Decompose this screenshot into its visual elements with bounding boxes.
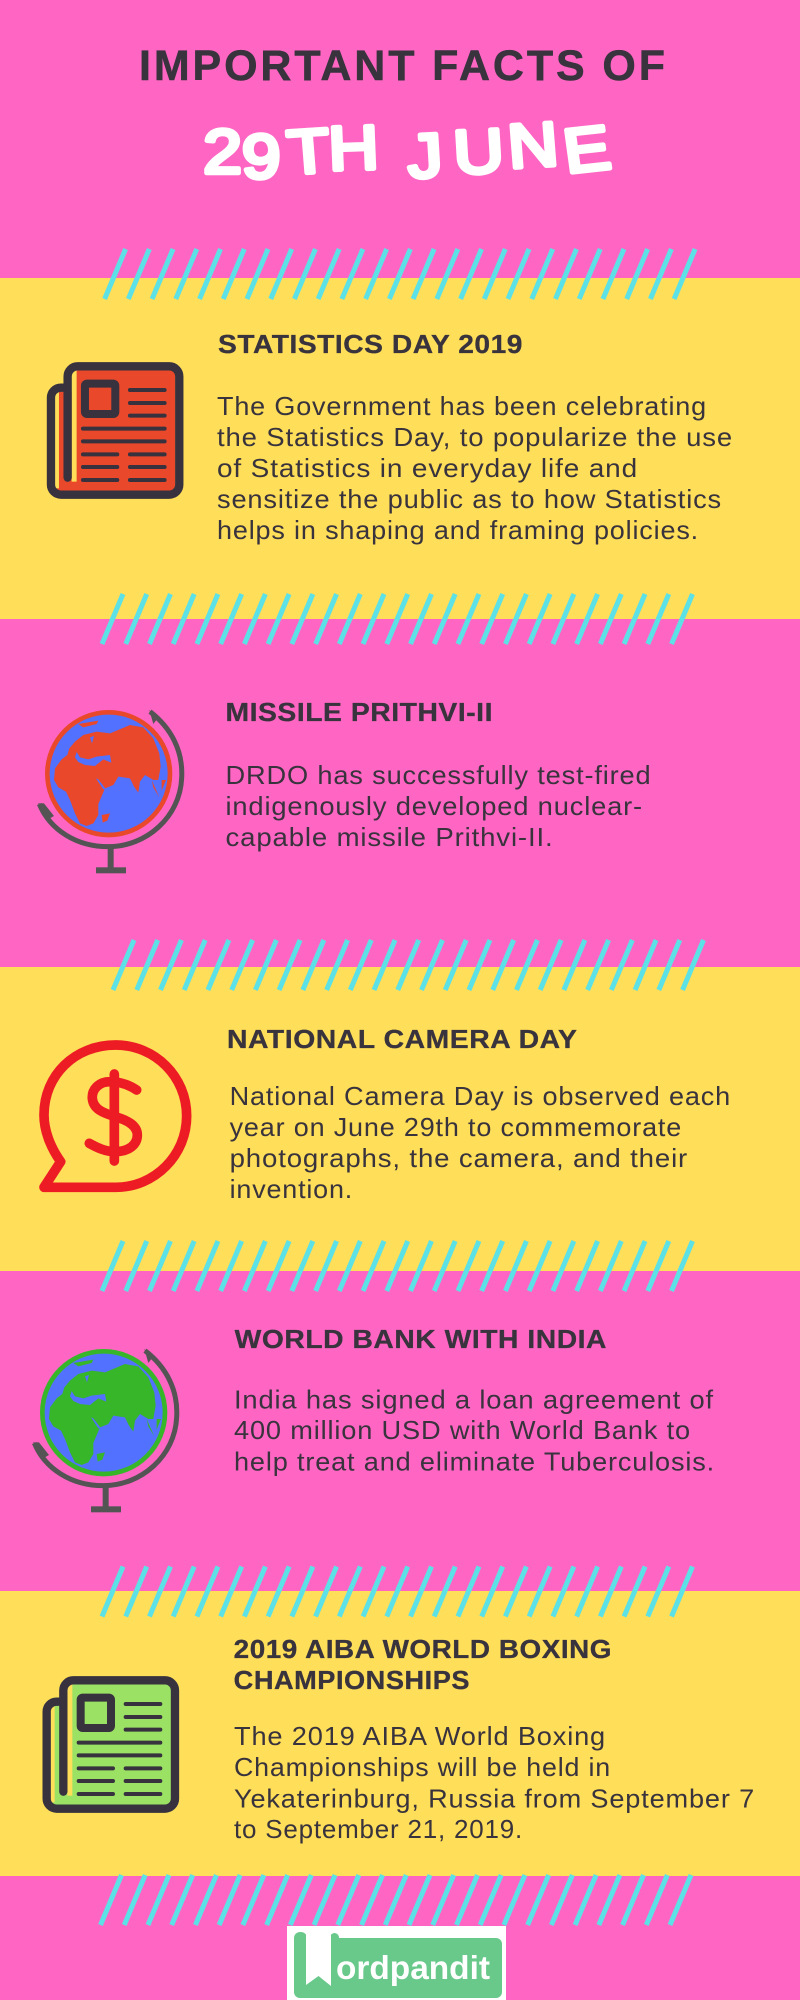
title: 29th June: 29TH JUNE — [203, 109, 614, 191]
body text: aiba boxing: The 2019 AIBA World Boxing — [234, 1721, 606, 1751]
title: important facts of: IMPORTANT FACTS OF — [139, 42, 665, 90]
heading: missile prithvi-II: MISSILE PRITHVI-II — [226, 697, 493, 727]
divider: hatch 5 — [102, 1566, 693, 1616]
panel: missile prithvi — [0, 619, 800, 967]
logo: wordpandit: ordpandit — [336, 1949, 490, 1986]
body text: national camera day: National Camera Day is observed each — [230, 1081, 731, 1111]
body text: missile prithvi: DRDO has successfully test-fired — [226, 760, 652, 790]
body text: aiba boxing: Yekaterinburg, Russia from September 7 — [234, 1784, 755, 1814]
body text: world bank — [234, 1384, 715, 1476]
panel: statistics day — [0, 278, 800, 619]
panel: world bank with india — [0, 1271, 800, 1591]
body text: national camera day: invention. — [230, 1174, 353, 1204]
body text: statistics day: The Government has been celebrating — [217, 391, 707, 421]
body text: statistics day: the Statistics Day, to popularize the use — [217, 422, 733, 452]
icon: red and blue globe — [38, 710, 182, 873]
panel: aiba boxing — [0, 1591, 800, 1876]
body text: world bank: 400 million USD with World Bank to — [234, 1415, 691, 1445]
body text: missile prithvi: capable missile Prithvi-II. — [226, 822, 554, 852]
icon: green and blue globe — [33, 1349, 177, 1512]
panel: national camera day — [0, 967, 800, 1271]
body text: statistics day: helps in shaping and framing policies. — [217, 515, 699, 545]
heading: statistics day 2019: STATISTICS DAY 2019 — [218, 329, 523, 359]
divider: hatch 1 — [105, 249, 695, 299]
body text: aiba boxing: Championships will be held in — [234, 1752, 611, 1782]
panel: header — [0, 0, 800, 278]
icon: green newspaper — [47, 1680, 175, 1809]
divider: hatch 2 — [102, 594, 693, 644]
icon: dollar speech bubble — [44, 1045, 187, 1187]
heading: 2019 aiba world boxing championships: 2019 AIBA WORLD BOXING — [234, 1634, 612, 1664]
body text: missile prithvi — [226, 760, 652, 852]
body text: national camera day: photographs, the camera, and their — [230, 1143, 688, 1173]
body text: national camera day — [230, 1081, 731, 1204]
heading: world bank with india: WORLD BANK WITH INDIA — [235, 1324, 607, 1354]
body text: world bank: India has signed a loan agreement of — [234, 1384, 714, 1414]
body text: statistics day — [217, 391, 733, 545]
divider: hatch 3 — [113, 940, 704, 990]
body text: missile prithvi: indigenously developed nuclear- — [226, 791, 643, 821]
heading: national camera day: NATIONAL CAMERA DAY — [227, 1024, 578, 1054]
body text: statistics day: of Statistics in everyday life and — [217, 453, 638, 483]
body text: national camera day: year on June 29th to commemorate — [230, 1112, 682, 1142]
heading: 2019 aiba world boxing championships — [234, 1634, 612, 1695]
heading: 2019 aiba world boxing championships: CHAMPIONSHIPS — [234, 1665, 470, 1695]
body text: aiba boxing — [234, 1721, 755, 1844]
panel: footer — [0, 1876, 800, 2000]
divider: hatch 4 — [102, 1241, 693, 1291]
logo: wordpandit — [287, 1926, 506, 2000]
icon: red newspaper — [51, 366, 179, 495]
body text: world bank: help treat and eliminate Tuberculosis. — [234, 1446, 715, 1476]
body text: statistics day: sensitize the public as to how Statistics — [217, 484, 722, 514]
divider: hatch 6 — [100, 1875, 691, 1925]
body text: aiba boxing: to September 21, 2019. — [234, 1814, 523, 1844]
